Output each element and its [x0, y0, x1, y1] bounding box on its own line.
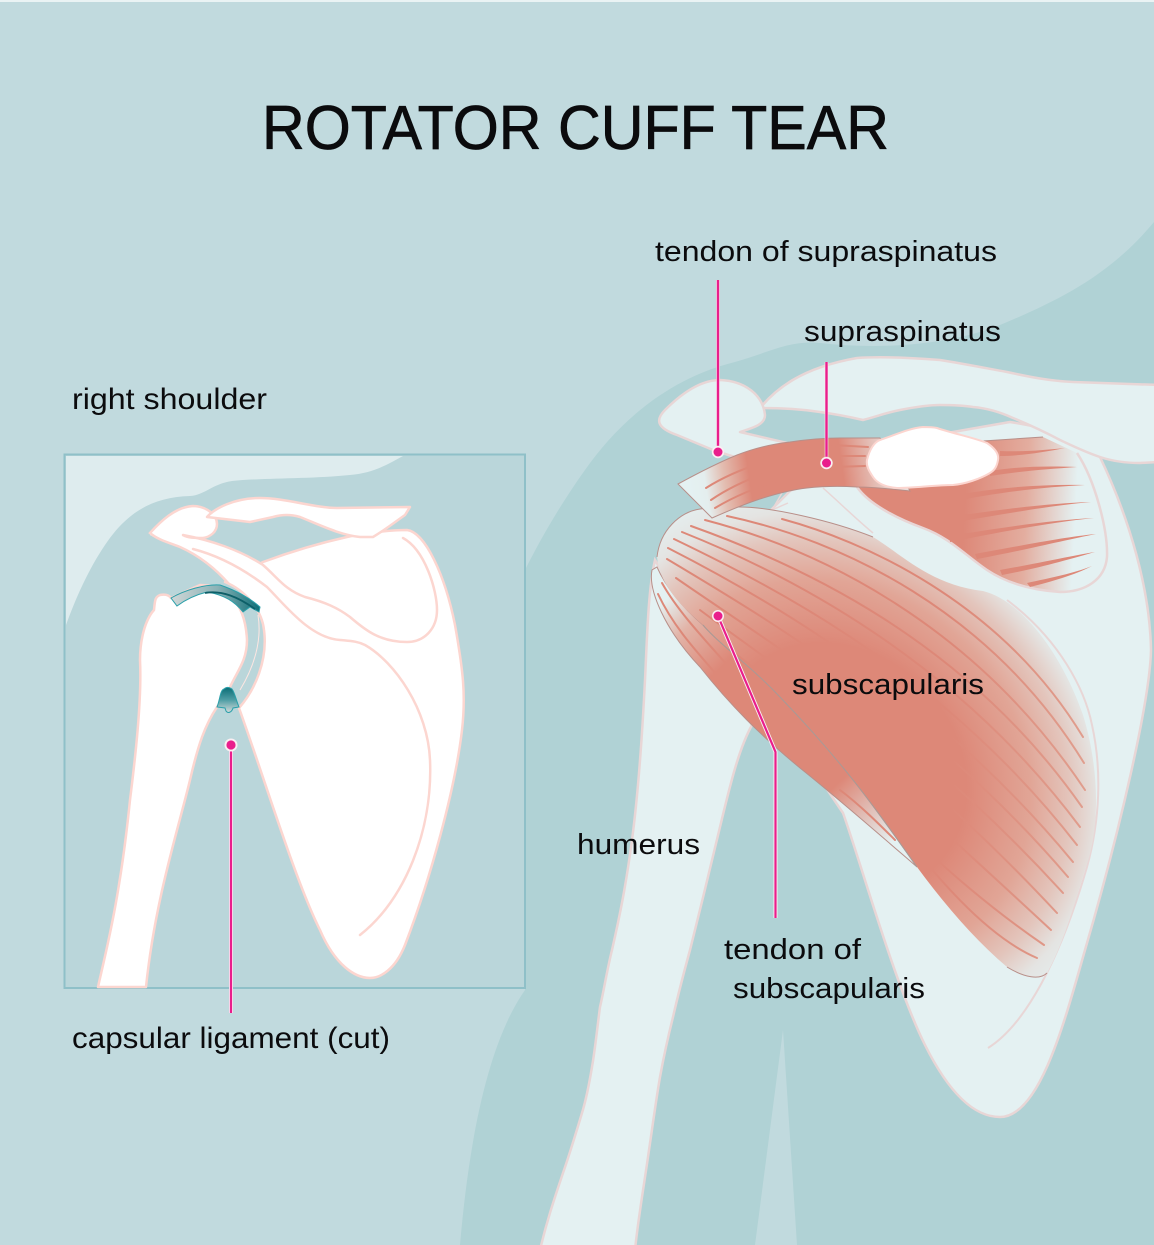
scapular spine outline	[183, 535, 437, 642]
capsular ligament upper part	[171, 585, 260, 612]
band fibres	[706, 445, 868, 508]
capsular ligament lower part	[217, 688, 239, 712]
spine and acromion fill	[150, 506, 263, 590]
leader: capsular ligament	[224, 738, 238, 1013]
subscapularis muscle	[657, 507, 1096, 977]
scapular spine lower line	[193, 549, 430, 935]
glenoid rim line	[772, 493, 788, 510]
supraspinatus tendon band	[678, 438, 910, 518]
clavicle	[760, 357, 1154, 463]
clavicle	[207, 498, 410, 537]
body silhouette	[460, 222, 1154, 1245]
spine inner line	[823, 488, 873, 533]
scapula inner border	[988, 600, 1098, 1048]
lower tendon fibres	[658, 583, 895, 840]
label: tendon of subscapularis: tendon of	[724, 934, 862, 966]
humerus	[98, 585, 247, 987]
acromion outline	[150, 506, 229, 584]
label: supraspinatus: supraspinatus	[804, 316, 1001, 348]
shoulder skin highlight	[66, 456, 403, 625]
inner glenoid line	[240, 615, 259, 690]
torn tendon gap	[867, 427, 998, 488]
panel: right shoulder bones	[64, 454, 525, 988]
acromion	[659, 380, 820, 480]
label: capsular ligament: capsular ligament (cut)	[72, 1022, 390, 1055]
supraspinatus fibres	[950, 448, 1096, 587]
title: ROTATOR CUFF TEAR	[262, 94, 889, 163]
label: subscapularis: subscapularis	[792, 669, 984, 701]
subscapularis fibres	[667, 516, 1085, 958]
humerus	[540, 560, 752, 1245]
scapula	[760, 422, 1151, 1117]
scapula	[225, 530, 464, 978]
panel: rotator cuff anatomy	[540, 357, 1154, 1245]
lower subscapularis tendon	[651, 567, 917, 867]
supraspinatus muscle	[857, 437, 1107, 592]
label: humerus: humerus	[577, 829, 700, 861]
label: right shoulder: right shoulder	[72, 383, 267, 416]
muscle outline	[657, 507, 1047, 977]
label: tendon of supraspinatus: tendon of supraspinatus	[655, 236, 997, 268]
leader: supraspinatus	[820, 362, 833, 469]
label: tendon of subscapularis: subscapularis	[733, 973, 925, 1005]
leader: tendon of subscapularis	[712, 610, 776, 918]
leader: tendon of supraspinatus	[712, 280, 724, 458]
